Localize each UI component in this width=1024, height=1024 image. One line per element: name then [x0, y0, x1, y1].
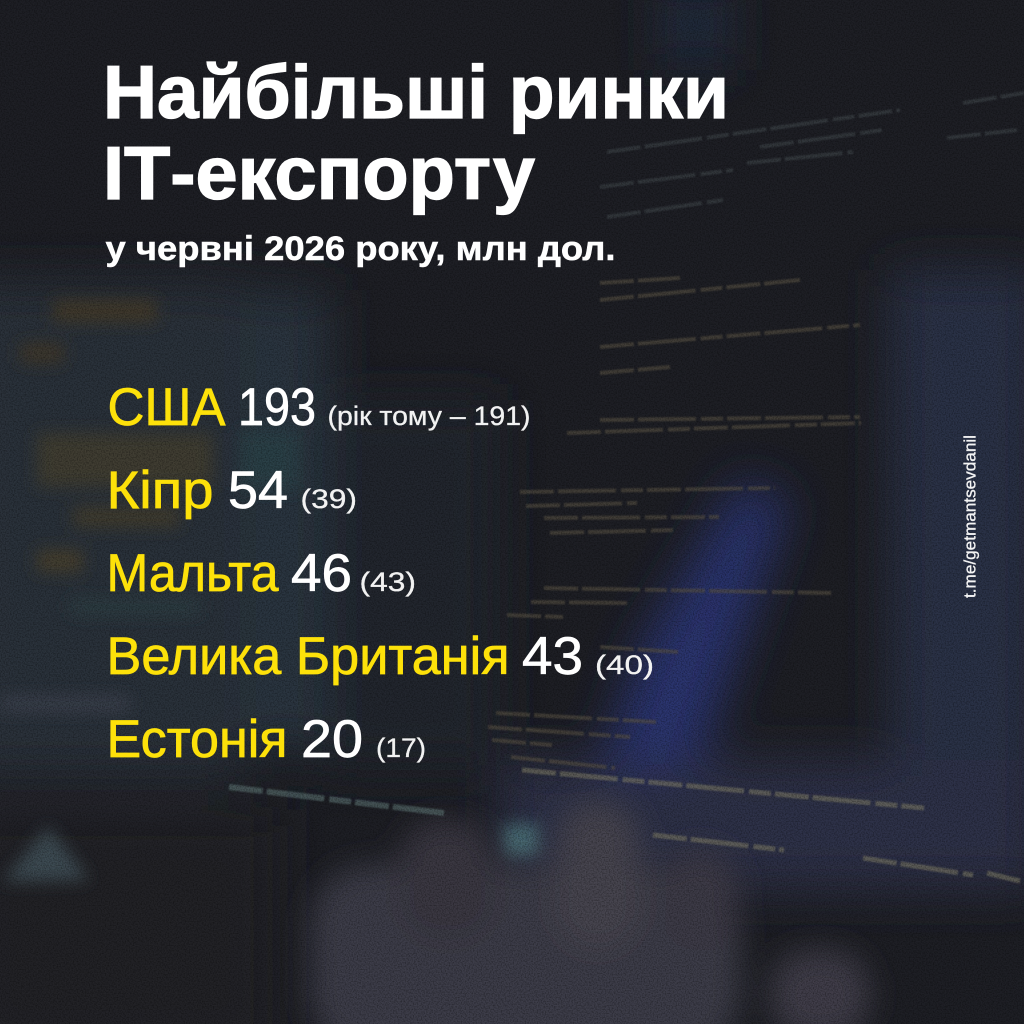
row: Cyprus [106, 461, 357, 520]
row: Malta [106, 544, 416, 603]
row: Estonia: Естонія [106, 710, 288, 769]
row: Estonia: 20 [301, 710, 363, 769]
row: United Kingdom: (40) [595, 650, 654, 680]
row: Cyprus: (39) [300, 484, 357, 514]
row: Estonia: (17) [376, 733, 426, 763]
row: USA: США [108, 378, 226, 437]
title [103, 50, 729, 215]
row: Cyprus: 54 [228, 461, 288, 520]
source handle: t.me/getmantsevdanil [960, 435, 980, 598]
market list [106, 378, 654, 769]
row: USA [108, 378, 530, 437]
row: Estonia [106, 710, 426, 769]
subtitle: у червні 2026 року, млн дол. [106, 230, 616, 268]
row: United Kingdom: Велика Британія [106, 627, 510, 686]
row: Malta: 46 [291, 544, 352, 603]
row: Malta: Мальта [106, 544, 279, 603]
row: United Kingdom: 43 [522, 627, 583, 686]
row: Malta: (43) [360, 567, 416, 597]
row: Cyprus: Кіпр [106, 461, 214, 520]
title: ІТ-експорту [103, 131, 535, 215]
row: USA: 193 [238, 378, 316, 437]
row: USA: (рік тому – 191) [328, 401, 530, 431]
title: Найбільші ринки [103, 50, 729, 134]
